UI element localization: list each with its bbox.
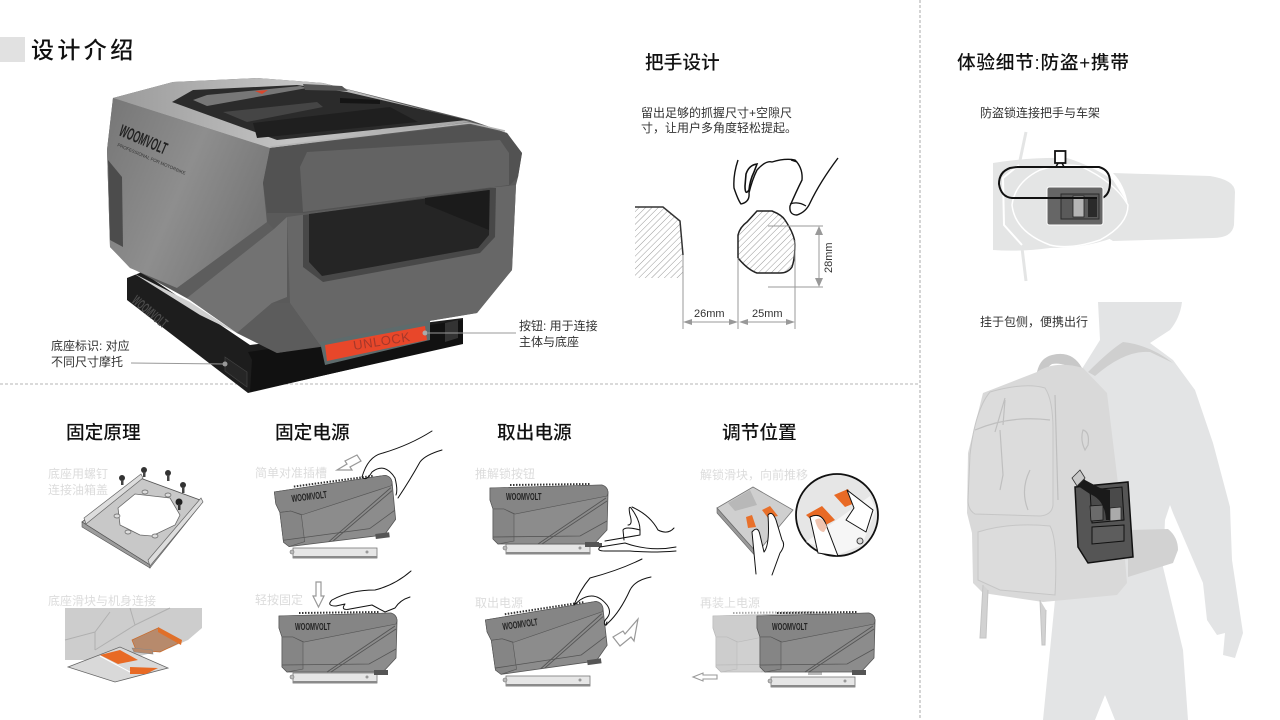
product render: main power unit on base: UNLOCK: [352, 329, 412, 353]
caption: push unlock: 推解锁按钮: [475, 466, 535, 481]
heading: fixing principle: 固定原理: [66, 422, 141, 443]
press arrow: [313, 582, 324, 607]
hand: [599, 507, 676, 552]
step: slide and remount: WOOMVOLT: [772, 622, 808, 632]
person silhouette: [1043, 302, 1243, 720]
callout: base mark: 底座标识: 对应: [51, 338, 130, 353]
handle window: [303, 188, 496, 282]
pack details: [975, 395, 1088, 510]
anti-theft lock diagram: [993, 132, 1235, 281]
product render: main power unit on base: [107, 78, 522, 393]
caption: unlock slider: 解锁滑块，向前推移: [700, 467, 808, 482]
front handle band: [263, 125, 522, 213]
lock box: [1055, 151, 1066, 163]
fingers: [734, 158, 838, 215]
direction arrow: [337, 455, 361, 470]
front pocket: [968, 386, 1053, 516]
slider illustration: [65, 608, 202, 682]
body silhouette: [107, 78, 522, 353]
page dividers: [0, 0, 920, 720]
top handle: [1037, 354, 1082, 372]
bottom facet: [237, 303, 320, 353]
caption: base screws: [48, 466, 108, 497]
callout: button: [422, 318, 598, 349]
hand: [574, 559, 651, 625]
step: tilted unit with hand: [274, 431, 442, 558]
handle section diagram: 25mm: [752, 308, 783, 320]
lift arrow: [613, 619, 638, 646]
logo: WOOMVOLT: [117, 121, 171, 158]
heading: experience details: 体验细节:防盗+携带: [957, 52, 1130, 73]
unlock button: [320, 320, 430, 365]
text: handle description: 寸，让用户多角度轻松提起。: [641, 120, 797, 135]
backpack with device: [967, 342, 1178, 645]
step: push unlock button: WOOMVOLT: [506, 492, 542, 502]
fingers in zoom: [810, 515, 838, 556]
caption: remount: 再装上电源: [700, 596, 760, 610]
shoulder strap: [1088, 342, 1173, 376]
callout: base mark: [51, 338, 228, 369]
step: lifting unit: WOOMVOLT: [502, 617, 538, 632]
device: [1047, 187, 1103, 225]
motorcycle silhouette: [993, 158, 1130, 251]
diagonal band: [177, 222, 274, 298]
handle section diagram: 28mm: [823, 242, 835, 273]
extension lines: [683, 226, 823, 329]
title marker: [0, 37, 25, 62]
text: anti-theft: 防盗锁连接把手与车架: [980, 105, 1100, 120]
dimension arrows: [683, 226, 823, 325]
heading: adjust position: 调节位置: [722, 422, 797, 443]
handle section diagram: [635, 158, 838, 329]
text: handle description: [641, 105, 797, 135]
lock cable: [999, 167, 1110, 198]
top dark control panel: [172, 85, 467, 140]
step: unlock slider with zoom circle: [717, 474, 878, 575]
title: 设计介绍: [31, 37, 137, 63]
base plate illustration with screws: [82, 467, 203, 568]
callout: button: 按钮: 用于连接: [519, 318, 598, 333]
product render: main power unit on base: WOOMVOLT: [129, 293, 170, 332]
body left face: [107, 98, 270, 288]
slide arrow: [693, 673, 717, 681]
hanging straps: [980, 585, 1046, 645]
step: pressing unit: WOOMVOLT: [295, 622, 331, 632]
screws: [119, 475, 125, 481]
product render: main power unit on base: PROFESSIONAL FOR MOTORBIKE: [117, 142, 186, 176]
step: push unlock button: [490, 484, 676, 554]
callout: button: 主体与底座: [519, 334, 579, 349]
step: pressing unit: [279, 571, 411, 684]
front lower face: [287, 185, 516, 345]
caption: base screws: 连接油箱盖: [48, 482, 108, 497]
step: lifting unit: [485, 559, 651, 686]
dimension labels: 26mm: [694, 308, 725, 320]
waist belt: [1128, 529, 1178, 577]
text: hang on backpack: 挂于包侧，便携出行: [980, 314, 1088, 329]
hatched handle section: [738, 211, 795, 273]
lower pocket: [978, 525, 1056, 595]
heading: handle design: 把手设计: [645, 52, 720, 73]
text: handle description: 留出足够的抓握尺寸+空隙尺: [641, 105, 792, 120]
caption: press to fix: 轻按固定: [255, 592, 303, 607]
base plate: [127, 272, 463, 393]
heading: fix power: 固定电源: [275, 422, 350, 443]
caption: remove: 取出电源: [475, 596, 523, 610]
zoom circle: [796, 474, 878, 556]
hanging device: [1075, 482, 1133, 563]
hand: [752, 513, 784, 575]
step: slide and remount: [693, 612, 875, 688]
hand: [330, 571, 411, 612]
top surface: [113, 78, 470, 148]
heading: remove power: 取出电源: [497, 422, 572, 443]
callout: base mark: 不同尺寸摩托: [51, 354, 123, 369]
caption: slider link: 底座滑块与机身连接: [48, 593, 156, 608]
caption: base screws: 底座用螺钉: [48, 466, 108, 481]
caption: align slot: 简单对准插槽: [255, 466, 327, 480]
hatched body section: [635, 207, 683, 278]
hand: [362, 431, 442, 498]
step: tilted unit with hand: WOOMVOLT: [291, 489, 328, 504]
pack body: [967, 365, 1127, 602]
